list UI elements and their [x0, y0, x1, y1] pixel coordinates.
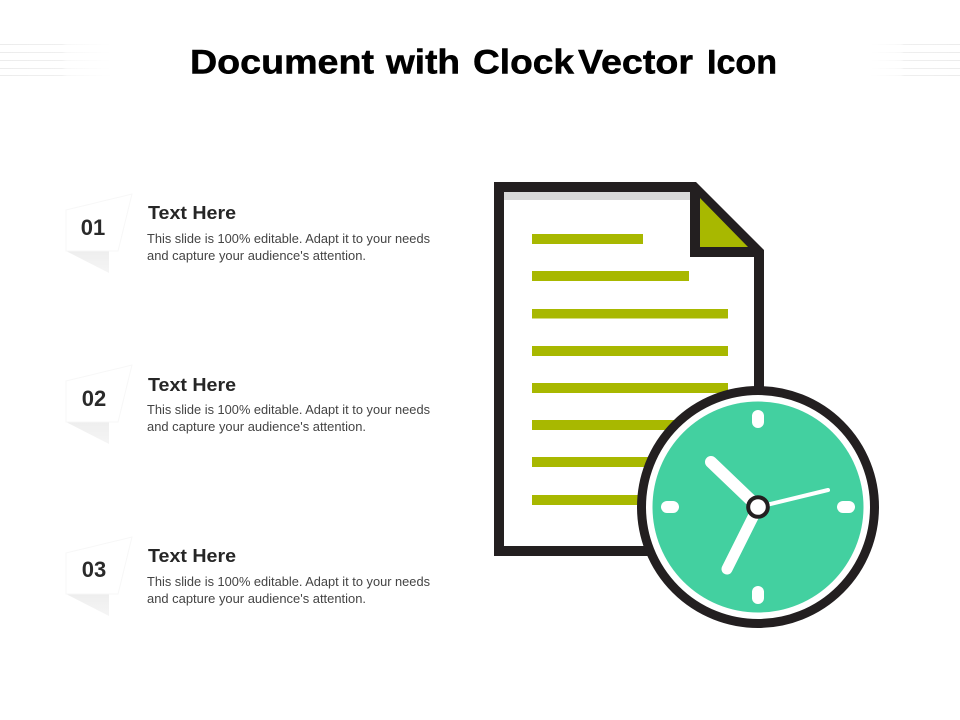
document fold — [700, 198, 748, 247]
icon: number badge 01 — [66, 194, 132, 273]
clock hands — [711, 462, 828, 569]
heading: item 02: Text Here — [148, 375, 236, 395]
text block: item 02 — [147, 403, 430, 434]
text block: item 01 — [147, 232, 430, 263]
icon: clock — [642, 390, 874, 624]
text block: item 03: and capture your audience's attention. — [147, 592, 366, 606]
panel: item 02 — [66, 365, 430, 444]
text block: item 01: This slide is 100% editable. Adapt it to your needs — [147, 232, 430, 246]
icon: number badge 03 — [66, 537, 132, 616]
clock hour ticks — [661, 410, 855, 604]
icon: number badge 02 — [66, 365, 132, 444]
text block: item 02: This slide is 100% editable. Adapt it to your needs — [147, 403, 430, 417]
panel: item 01 — [66, 194, 430, 273]
title: Clock — [473, 44, 574, 82]
title: Vector — [578, 44, 693, 82]
icon: number badge 03: 03 — [82, 557, 106, 582]
text block: item 01: and capture your audience's attention. — [147, 249, 366, 263]
title — [190, 44, 777, 82]
clock centre pin — [748, 497, 768, 517]
title: Document — [190, 44, 374, 82]
heading: item 01: Text Here — [148, 203, 236, 223]
title: Icon — [707, 44, 777, 82]
icon: document — [494, 182, 764, 556]
icon: number badge 01: 01 — [81, 215, 105, 240]
text block: item 03: This slide is 100% editable. Adapt it to your needs — [147, 575, 430, 589]
text block: item 03 — [147, 575, 430, 606]
title: with — [385, 44, 460, 82]
panel: item 03 — [66, 537, 430, 616]
heading: item 03: Text Here — [148, 546, 236, 566]
document text lines — [532, 234, 728, 505]
icon: number badge 02: 02 — [82, 386, 106, 411]
text block: item 02: and capture your audience's attention. — [147, 420, 366, 434]
